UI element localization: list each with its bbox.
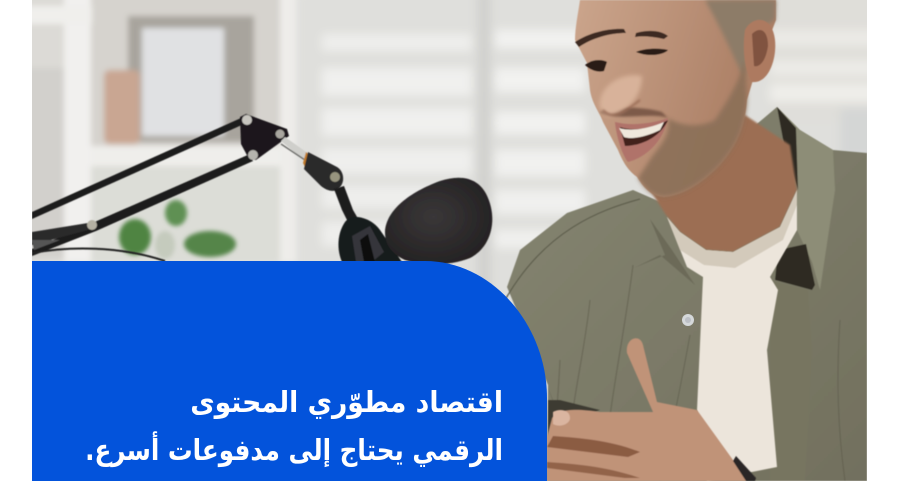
man: smiling mouth: [615, 118, 668, 162]
man: neck: [650, 115, 797, 252]
shirt button: [682, 314, 694, 326]
man: shirt: [505, 107, 867, 481]
blue panel: [32, 261, 547, 481]
headline: [85, 385, 503, 468]
man: white t-shirt: [667, 190, 797, 481]
microphone boom arm: [32, 114, 343, 261]
man: gesturing hand: [547, 338, 756, 481]
headline line 1: اقتصاد مطوّري المحتوى: [190, 385, 503, 419]
blurred green plant: [119, 200, 236, 259]
window blinds: [324, 0, 867, 284]
headline line 2: الرقمي يحتاج إلى مدفوعات أسرع.: [85, 433, 503, 467]
microphone with foam windscreen: [334, 178, 492, 264]
man: head and face: [575, 0, 776, 197]
